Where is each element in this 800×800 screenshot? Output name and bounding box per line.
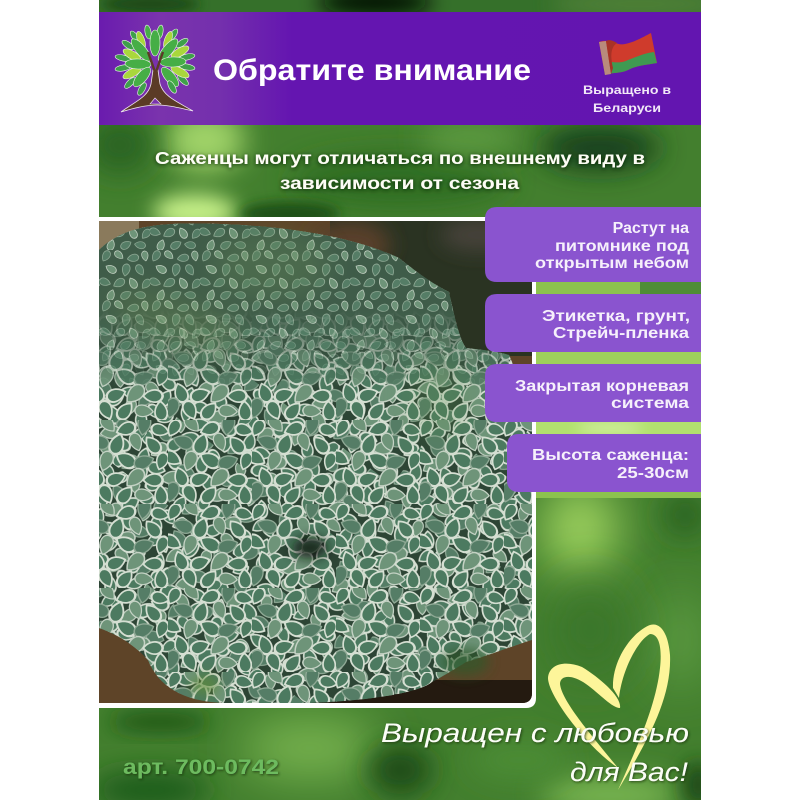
slogan (381, 718, 689, 787)
icon: yellow heart (548, 624, 670, 790)
origin label (583, 85, 671, 115)
subheading: зависимости от сезона (280, 173, 519, 193)
origin label: Беларуси (593, 103, 661, 115)
logo: tree (115, 25, 195, 112)
article number: арт. 700-0742 (123, 756, 279, 779)
photo: variegated shrub (99, 217, 536, 708)
origin label: Выращено в (583, 85, 671, 97)
callout cards (485, 207, 701, 492)
card: package (485, 294, 701, 352)
card: root system: Закрытая корневая (515, 378, 689, 395)
subheading: Саженцы могут отличаться по внешнему виду в (155, 148, 645, 168)
card: height: 25-30см (617, 465, 689, 482)
card: nursery: Растут на (613, 220, 689, 237)
subheading (155, 148, 645, 193)
card: height: Высота саженца: (532, 447, 689, 464)
card: root system: система (611, 395, 689, 412)
icon: Belarus flag (599, 33, 657, 75)
card: nursery (485, 207, 701, 282)
title: Обратите внимание (213, 54, 531, 87)
card: nursery: питомнике под (555, 238, 689, 255)
card: package: Стрейч-пленка (553, 325, 689, 342)
card: nursery: открытым небом (535, 255, 689, 272)
slogan: Выращен с любовью (381, 718, 689, 748)
card: height (507, 434, 701, 492)
card: root system (485, 364, 701, 422)
card: package: Этикетка, грунт, (542, 308, 690, 325)
slogan: для Вас! (570, 757, 689, 787)
header band (99, 12, 701, 125)
